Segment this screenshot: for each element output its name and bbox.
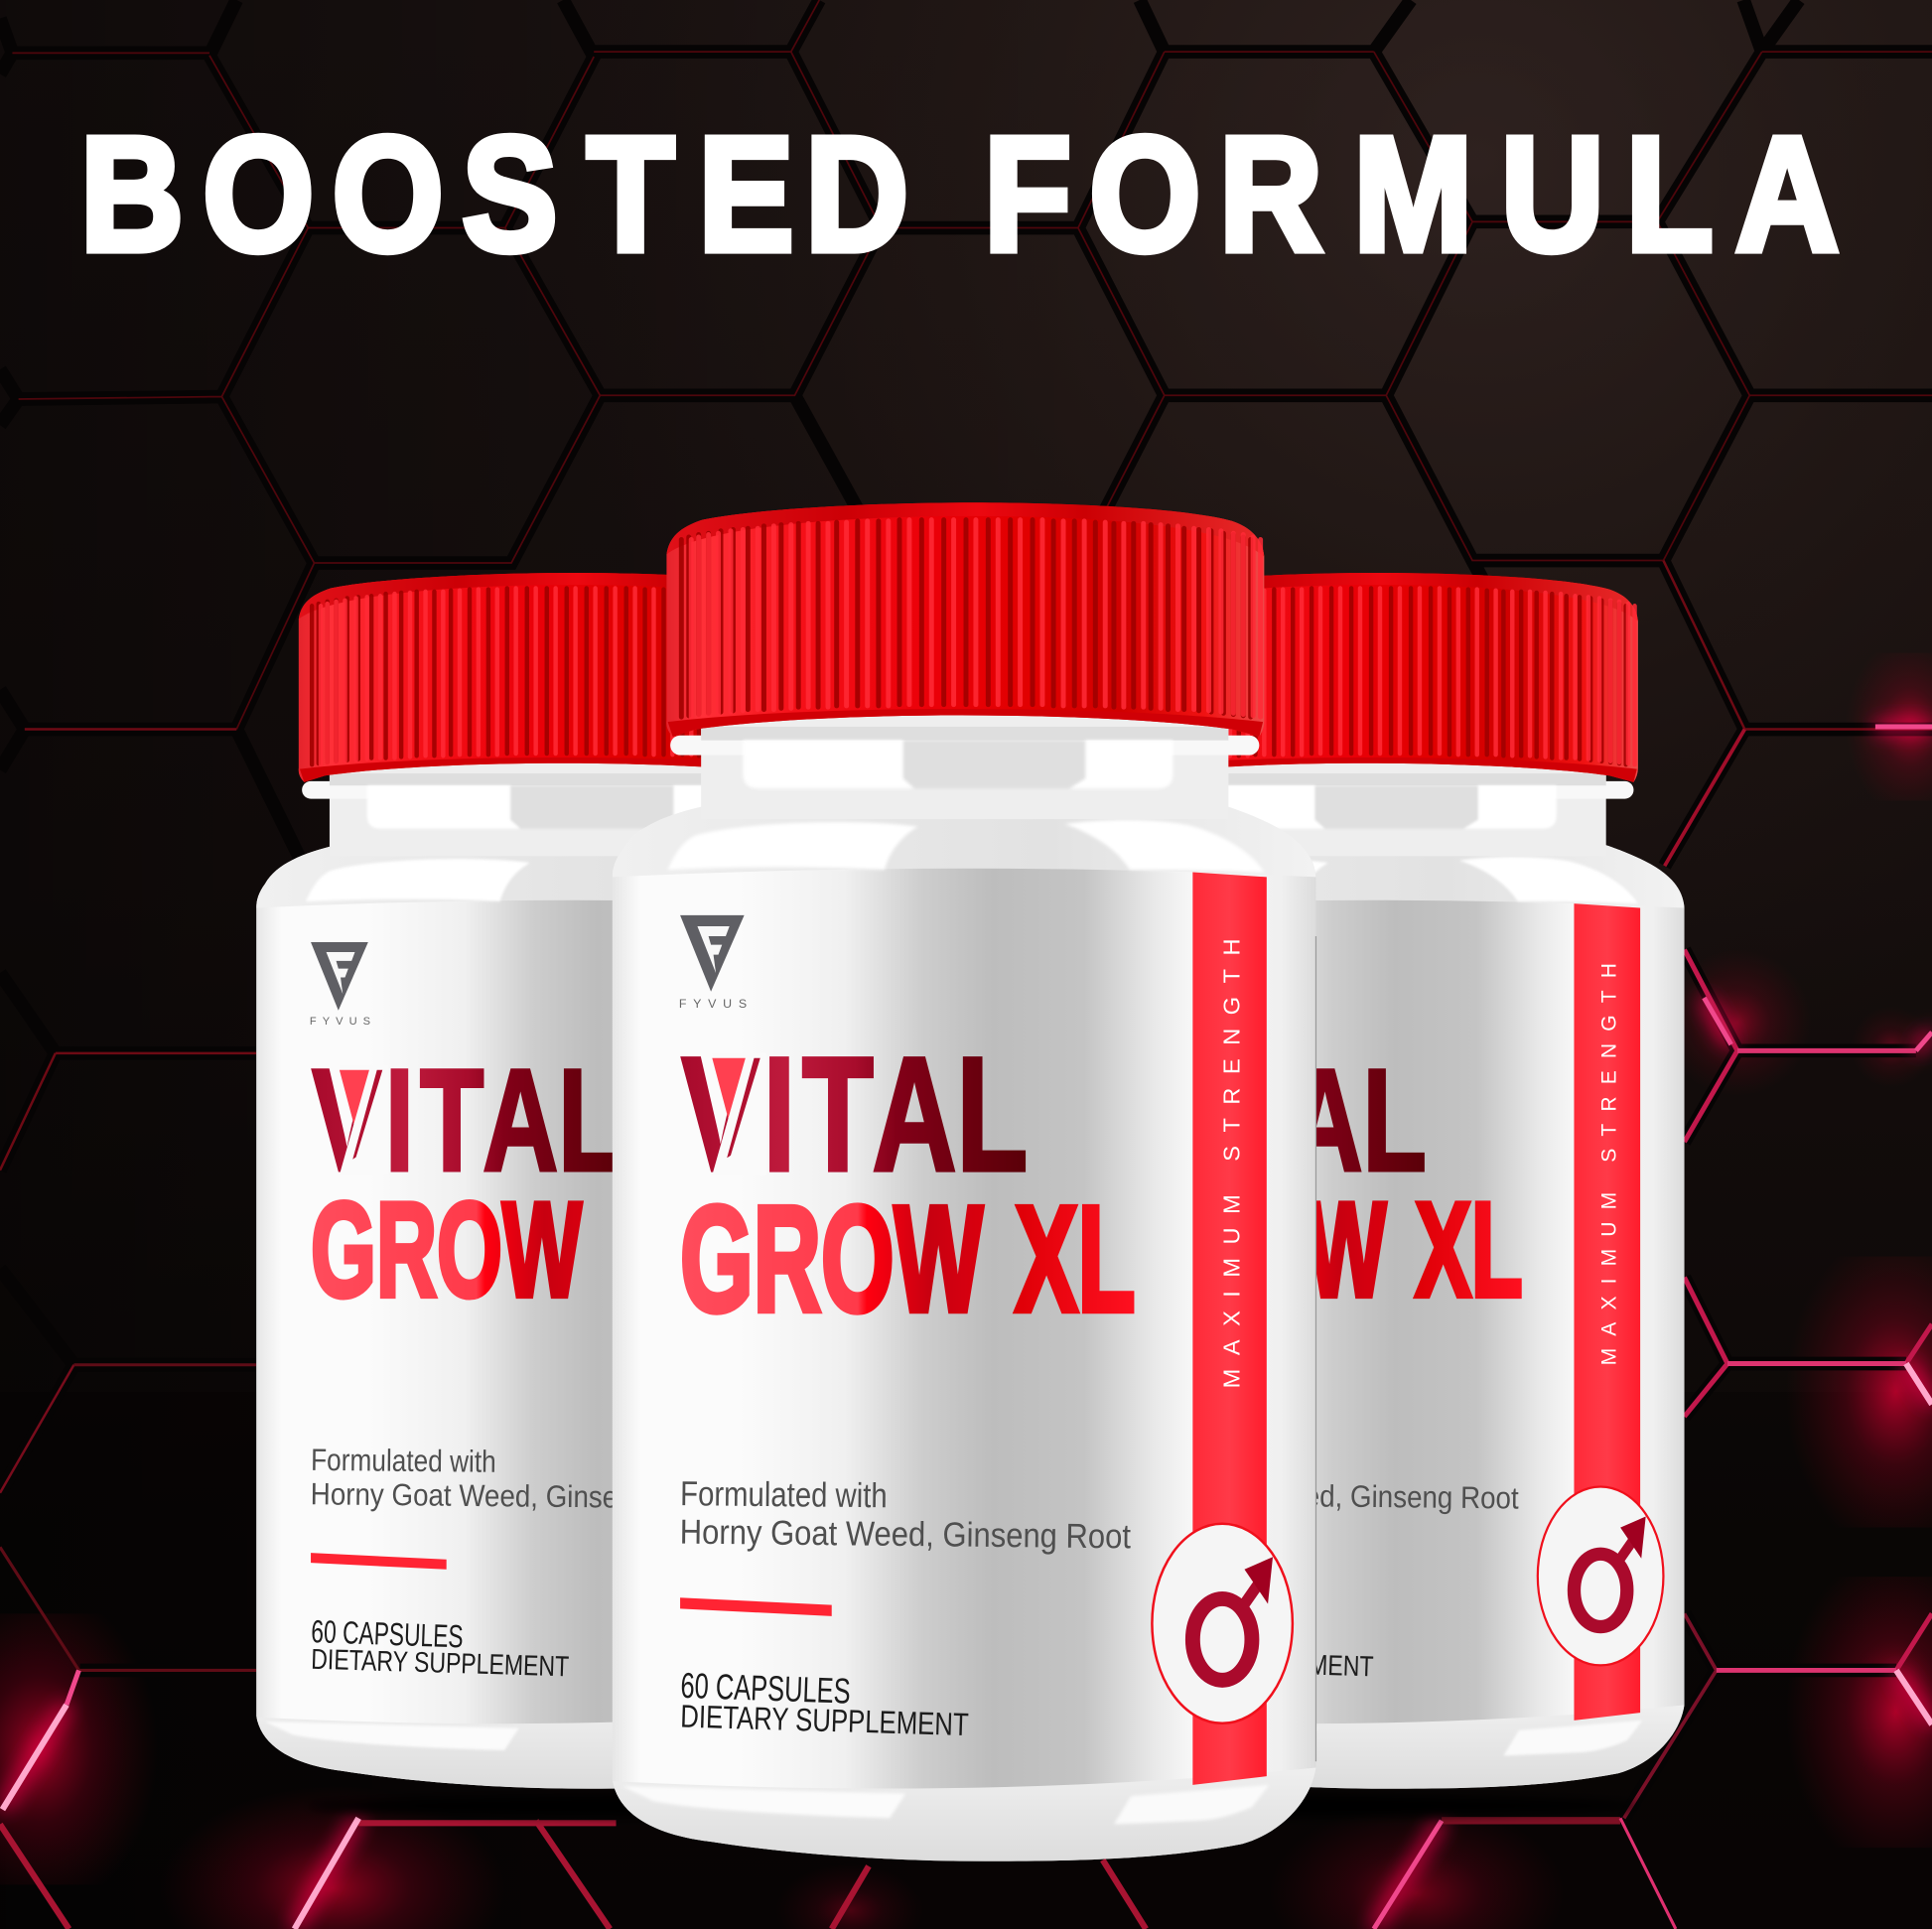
dietary supplement: DIETARY SUPPLEMENT <box>680 1699 969 1742</box>
right bottle body <box>1054 829 1685 1799</box>
center bottle <box>613 502 1315 1872</box>
ingredients text: Formulated with <box>1115 1443 1301 1479</box>
title: BOOSTED FORMULA <box>80 102 1839 285</box>
right bottle label <box>1115 903 1663 1721</box>
right bottle <box>1054 573 1685 1799</box>
center bottle cap and neck <box>666 502 1264 819</box>
product name GROW XL: GROW <box>680 1174 983 1343</box>
center bottle edge line <box>1314 936 1316 1761</box>
product name GROW XL: XL <box>1415 1174 1523 1324</box>
ingredients text: Horny Goat Weed, Ginseng Root <box>1115 1476 1519 1516</box>
left bottle <box>256 573 886 1799</box>
left bottle label <box>310 942 736 1683</box>
shadow under bottles <box>308 1792 1639 1820</box>
red divider <box>680 1597 832 1616</box>
right bottle cap and neck <box>1103 573 1638 856</box>
ingredients text: Formulated with <box>311 1443 496 1479</box>
ingredients text: Horny Goat Weed, Ginseng Root <box>311 1476 715 1516</box>
male symbol badge <box>1152 1524 1293 1723</box>
brand logo <box>680 915 745 992</box>
maximum strength text: MAXIMUM STRENGTH <box>1219 938 1245 1388</box>
red ambient glows <box>0 653 1932 1929</box>
dietary supplement: DIETARY SUPPLEMENT <box>1115 1644 1374 1683</box>
product name GROW XL: GROW <box>311 1174 582 1324</box>
brand name: FYVUS <box>310 1016 370 1028</box>
ingredients text <box>1115 1443 1520 1516</box>
red strength stripe <box>1192 872 1267 1785</box>
male symbol badge <box>1538 1487 1663 1665</box>
center bottle body <box>613 788 1315 1872</box>
product name VITAL: VITAL <box>312 1039 622 1202</box>
ingredients text <box>680 1475 1132 1556</box>
red divider <box>311 1553 447 1570</box>
product name GROW XL: XL <box>1015 1174 1135 1343</box>
stylised V <box>340 1065 388 1174</box>
glowing pink lines <box>0 727 1932 1929</box>
capsule count: 60 CAPSULES <box>311 1613 464 1654</box>
product name VITAL: VITAL <box>1117 1039 1427 1202</box>
dietary supplement: DIETARY SUPPLEMENT <box>311 1644 570 1683</box>
ingredients text: Horny Goat Weed, Ginseng Root <box>680 1514 1131 1556</box>
maximum strength text: MAXIMUM STRENGTH <box>1598 963 1621 1365</box>
ingredients text: Formulated with <box>680 1475 888 1515</box>
brand logo <box>311 942 368 1011</box>
capsule count: 60 CAPSULES <box>680 1665 851 1712</box>
red strength stripe <box>1574 903 1640 1721</box>
product name GROW XL: XL <box>627 1174 736 1324</box>
ingredients text <box>311 1443 715 1516</box>
product name GROW XL: GROW <box>1115 1174 1386 1324</box>
stylised V <box>712 1053 766 1175</box>
brand name: FYVUS <box>679 997 747 1011</box>
left bottle body <box>256 829 886 1799</box>
product name VITAL: VITAL <box>681 1025 1028 1205</box>
left bottle cap and neck <box>299 573 834 856</box>
